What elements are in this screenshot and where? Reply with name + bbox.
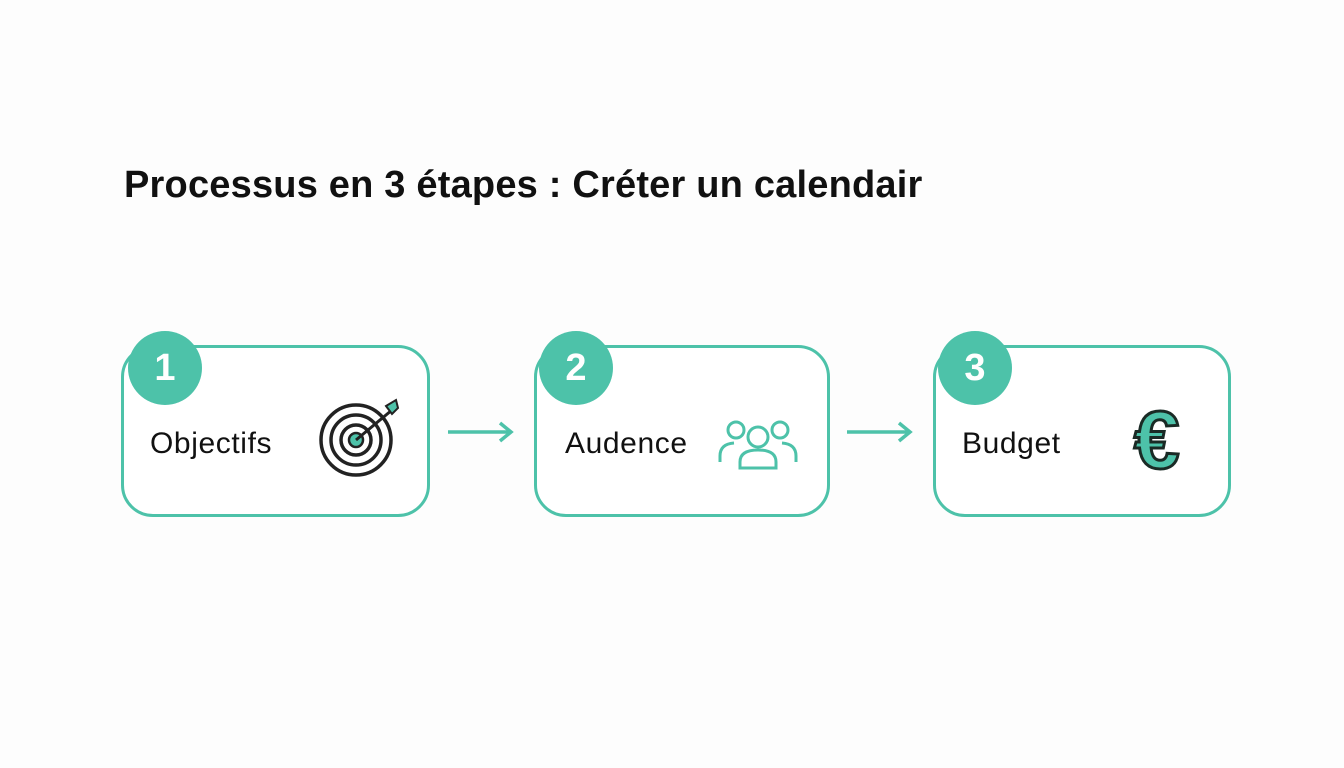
arrow 1 xyxy=(448,422,514,442)
icon: people xyxy=(718,420,798,470)
badge 3: 3 xyxy=(964,347,986,389)
label: Budget: Budget xyxy=(962,427,1061,460)
badge 1: 1 xyxy=(154,347,176,389)
panel: step 3 xyxy=(933,345,1231,517)
icon: euro: € xyxy=(1134,395,1180,486)
badge 3 xyxy=(938,331,1012,405)
badge 2 xyxy=(539,331,613,405)
panel: step 2 xyxy=(534,345,830,517)
label: Objectifs: Objectifs xyxy=(150,427,272,460)
label: Audence: Audence xyxy=(565,427,688,460)
badge 2: 2 xyxy=(565,347,587,389)
panel: step 1 xyxy=(121,345,430,517)
title: Processus en 3 étapes : Créter un calendair xyxy=(124,164,922,206)
badge 1 xyxy=(128,331,202,405)
icon: target xyxy=(319,398,400,477)
arrow 2 xyxy=(847,422,913,442)
